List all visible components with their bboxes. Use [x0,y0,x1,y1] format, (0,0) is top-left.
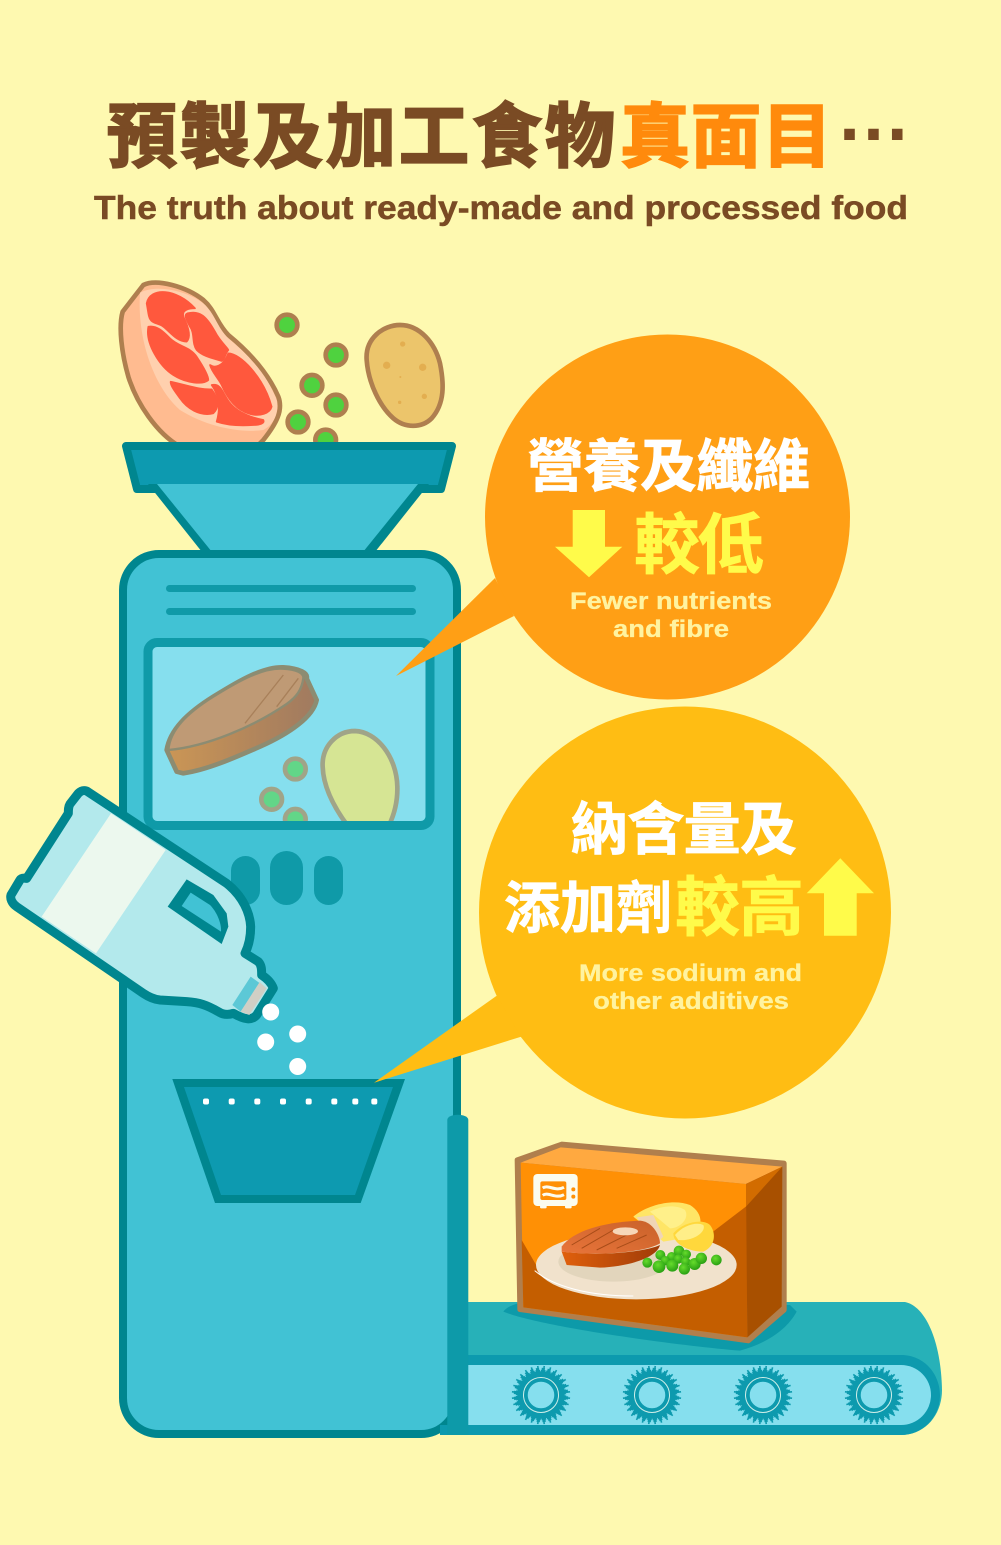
callout emphasis: lower: 較低 [634,508,764,582]
machine buttons [231,851,343,905]
falling salt [257,1004,306,1075]
belt upper surface [468,1302,942,1435]
box shadow [503,1303,797,1351]
icon: raw meat [121,283,280,447]
ready-meal box [503,1144,797,1351]
title block [94,72,911,226]
callout English: Fewer nutrients [570,588,772,615]
machine body [123,554,457,1434]
bubble shape [374,706,891,1118]
callout heading line 1: 納含量及 [571,798,797,862]
gear wheel 4 [846,1367,902,1423]
title: orange emphasis: 真面目 [620,98,832,176]
machine [123,446,457,1434]
icon: falling peas [277,315,346,450]
icon: processed potato [323,731,397,827]
callout English: More sodium and [579,960,802,987]
callout: fewer nutrients and fibre [396,334,850,700]
title: ellipsis: … [836,72,911,156]
salt dots in bowl [203,1098,377,1104]
callout heading: 營養及纖維 [527,435,810,499]
belt track [440,1355,940,1435]
window frame [148,642,430,826]
window contents: ingredients being processed [167,667,397,830]
arrow: up [807,858,874,936]
icon: processed peas [261,759,306,830]
conveyor belt [440,1115,942,1435]
icon: processed meat [167,667,317,773]
callout heading line 2: 添加劑 [504,877,672,940]
icon: meal on plate [535,1202,737,1299]
icon: potato [367,325,443,426]
callout: more sodium and other additives [374,706,891,1118]
hopper rim [126,446,452,489]
salt bowl [172,1079,405,1203]
callout English: and fibre [613,616,729,643]
hopper funnel [148,484,429,552]
callout English [570,588,772,643]
raw ingredients [121,283,443,450]
callout emphasis: higher: 較高 [675,871,804,944]
icon: additive bottle [11,791,273,1019]
gear wheel 3 [735,1367,791,1423]
box faces [517,1144,784,1341]
callout English: other additives [593,988,789,1015]
callout English [579,960,802,1015]
machine vent lines [166,585,416,615]
title: Chinese heading: 預製及加工食物 [107,98,615,176]
arrow: down [555,510,622,577]
belt post [447,1115,468,1435]
gear wheel 1 [513,1367,569,1423]
bubble shape [396,334,850,700]
gear wheel 2 [624,1367,680,1423]
subtitle: The truth about ready-made and processed food [94,189,908,226]
icon: microwave [533,1174,578,1208]
machine window [148,642,430,830]
